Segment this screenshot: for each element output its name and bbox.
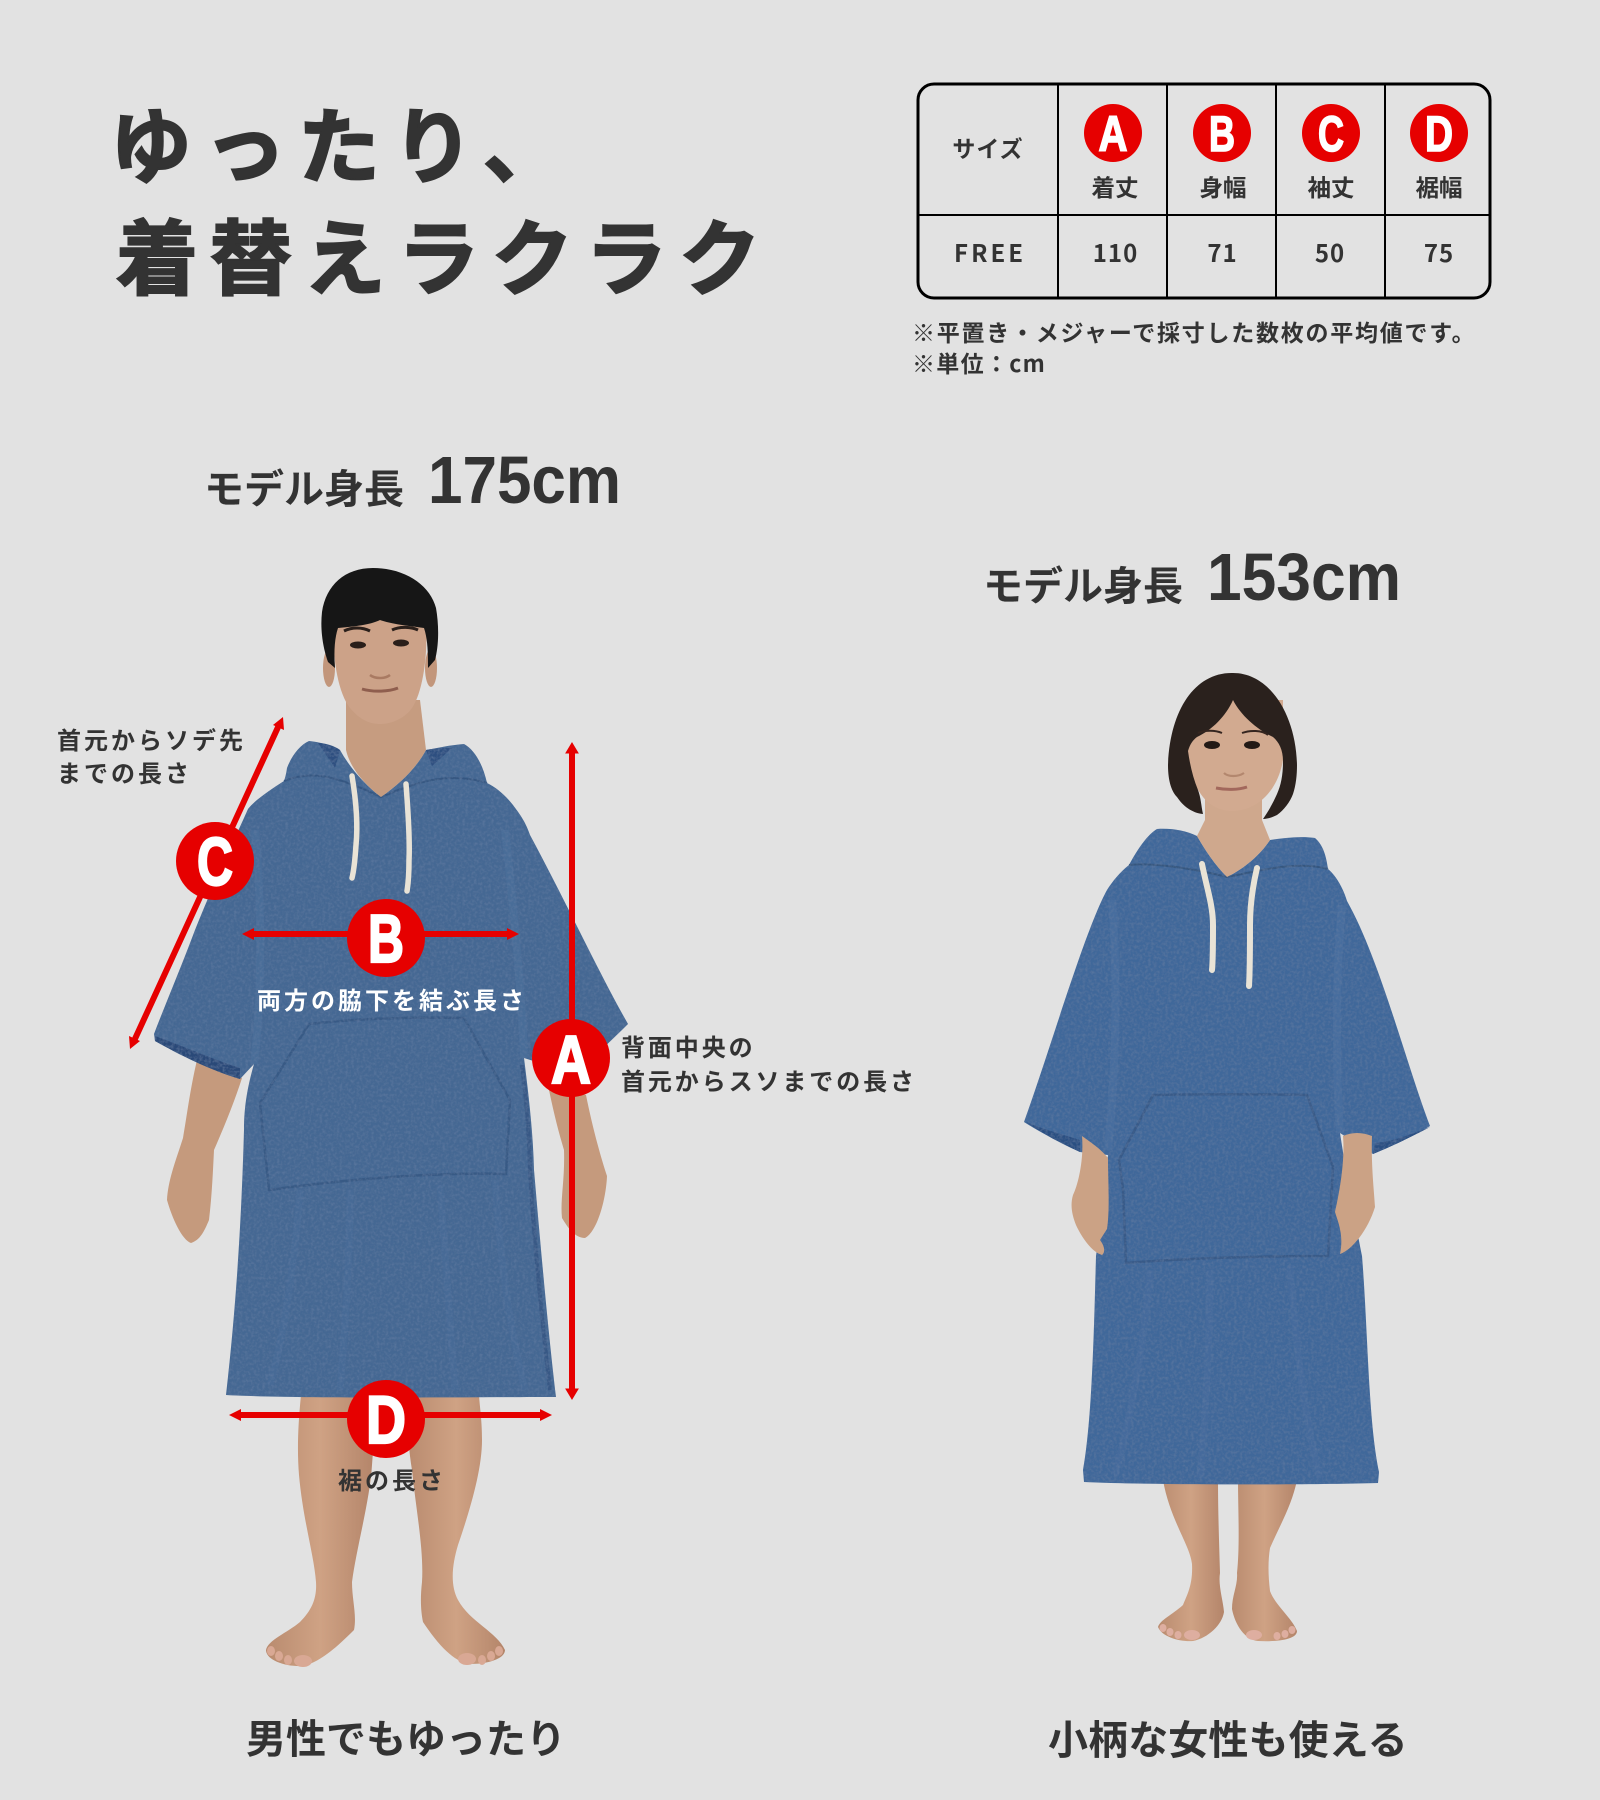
model height: male: 175cm [428, 443, 621, 518]
model height: female [983, 540, 1401, 615]
table row: FREE values: 110 [1093, 234, 1138, 269]
title: 着替えラクラク [116, 193, 773, 312]
table row: header: サイズ [952, 130, 1024, 164]
title: ゆったり、 [110, 81, 577, 200]
table row: header: A [1098, 106, 1128, 162]
table row: header: 身幅 [1200, 169, 1246, 203]
label: body length: 背面中央の [621, 1028, 756, 1063]
measurement A: length arrow [532, 743, 610, 1399]
male legs [266, 1395, 505, 1666]
female legs [1158, 1480, 1297, 1641]
label: hem: 裾の長さ [338, 1461, 446, 1496]
table notes: ※単位：cm [912, 345, 1046, 379]
label: sleeve length: までの長さ [57, 754, 192, 789]
size table [918, 84, 1490, 298]
label: body length: 首元からスソまでの長さ [621, 1062, 917, 1097]
male neck [346, 700, 426, 797]
male hoodie [154, 741, 628, 1398]
table row: header: C [1318, 106, 1344, 162]
table row: FREE values: 71 [1207, 234, 1238, 269]
male model figure [154, 568, 628, 1667]
table row: header: 着丈 [1092, 169, 1138, 203]
table row: FREE values: FREE [954, 234, 1026, 269]
female hands [1072, 1133, 1375, 1255]
label: sleeve length [57, 721, 246, 789]
female neck [1197, 790, 1270, 877]
table notes [912, 314, 1476, 379]
measurement C: sleeve arrow: C [197, 824, 233, 900]
table row: FREE values: 50 [1315, 234, 1345, 269]
measurement B: chest arrow: B [368, 901, 404, 977]
female drawstrings [1202, 864, 1257, 986]
table row: FREE values [954, 234, 1454, 269]
male toes [267, 1646, 503, 1667]
male head [321, 568, 438, 724]
female toes [1160, 1624, 1296, 1640]
table row: FREE values: 75 [1424, 234, 1454, 269]
caption: female: 小柄な女性も使える [1048, 1708, 1408, 1766]
female head [1168, 673, 1297, 819]
model height: female: モデル身長 [983, 554, 1183, 612]
title [110, 81, 773, 312]
label: chest width: 両方の脇下を結ぶ長さ [257, 981, 527, 1016]
male arms [167, 1060, 607, 1243]
table row: header: D [1425, 106, 1453, 162]
model height: male [204, 443, 621, 518]
table row: header: B [1209, 106, 1235, 162]
measurement C: sleeve arrow [129, 717, 284, 1049]
measurement D: hem arrow [229, 1380, 552, 1458]
table row: header: 袖丈 [1308, 169, 1354, 203]
caption: male: 男性でもゆったり [246, 1707, 566, 1765]
measurement D: hem arrow: D [366, 1382, 406, 1458]
table notes: ※平置き・メジャーで採寸した数枚の平均値です。 [912, 314, 1476, 348]
label: body length [621, 1028, 917, 1097]
measurement A: length arrow: A [551, 1022, 591, 1098]
label: sleeve length: 首元からソデ先 [57, 721, 246, 756]
female hoodie [1024, 829, 1430, 1484]
male drawstrings [352, 776, 409, 891]
table row: header [952, 104, 1468, 203]
model height: male: モデル身長 [204, 457, 404, 515]
female model figure [1024, 673, 1430, 1641]
table row: header: 裾幅 [1416, 169, 1462, 203]
model height: female: 153cm [1207, 540, 1401, 615]
measurement B: chest arrow [242, 899, 519, 977]
